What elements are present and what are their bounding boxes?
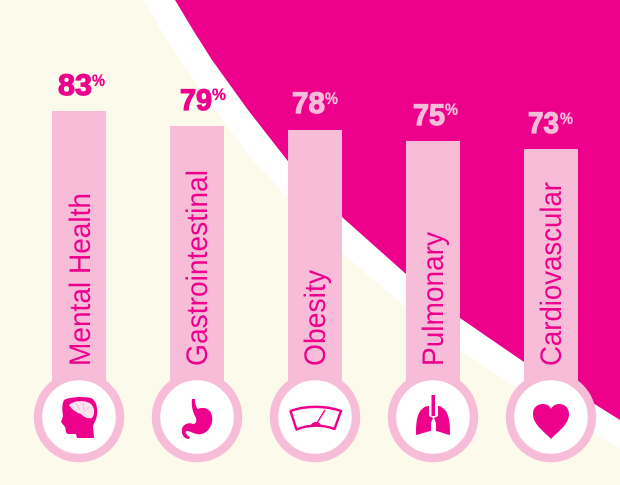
label: Cardiovascular: Cardiovascular — [535, 182, 568, 366]
value: 79%: 79 — [180, 84, 212, 117]
value: 75%: 75 — [413, 99, 445, 132]
label: Mental Health: Mental Health — [64, 193, 97, 366]
icon: heart — [510, 376, 592, 458]
value: 79%: % — [212, 85, 226, 104]
label: Gastrointestinal: Gastrointestinal — [181, 170, 214, 366]
white curved band — [143, 0, 620, 448]
bar: Obesity — [288, 130, 342, 391]
icon: head with brain — [38, 376, 120, 458]
value: 83%: 83 — [58, 69, 92, 102]
value: 78%: 78 — [292, 87, 325, 120]
icon: lungs — [392, 376, 474, 458]
bar: Pulmonary — [406, 141, 460, 391]
bar: Mental Health — [52, 111, 106, 391]
value: 73%: % — [560, 109, 573, 128]
value: 73%: 73 — [528, 107, 559, 140]
bar: Cardiovascular — [524, 149, 578, 391]
label: Pulmonary: Pulmonary — [417, 232, 450, 366]
magenta curved panel — [175, 0, 620, 420]
value: 78%: % — [325, 89, 338, 108]
bar: Gastrointestinal — [170, 126, 224, 391]
icon: weight scale gauge — [274, 376, 356, 458]
value: 83%: % — [92, 71, 105, 90]
label: Obesity: Obesity — [299, 270, 332, 366]
icon: stomach — [156, 376, 238, 458]
value: 75%: % — [445, 100, 458, 119]
